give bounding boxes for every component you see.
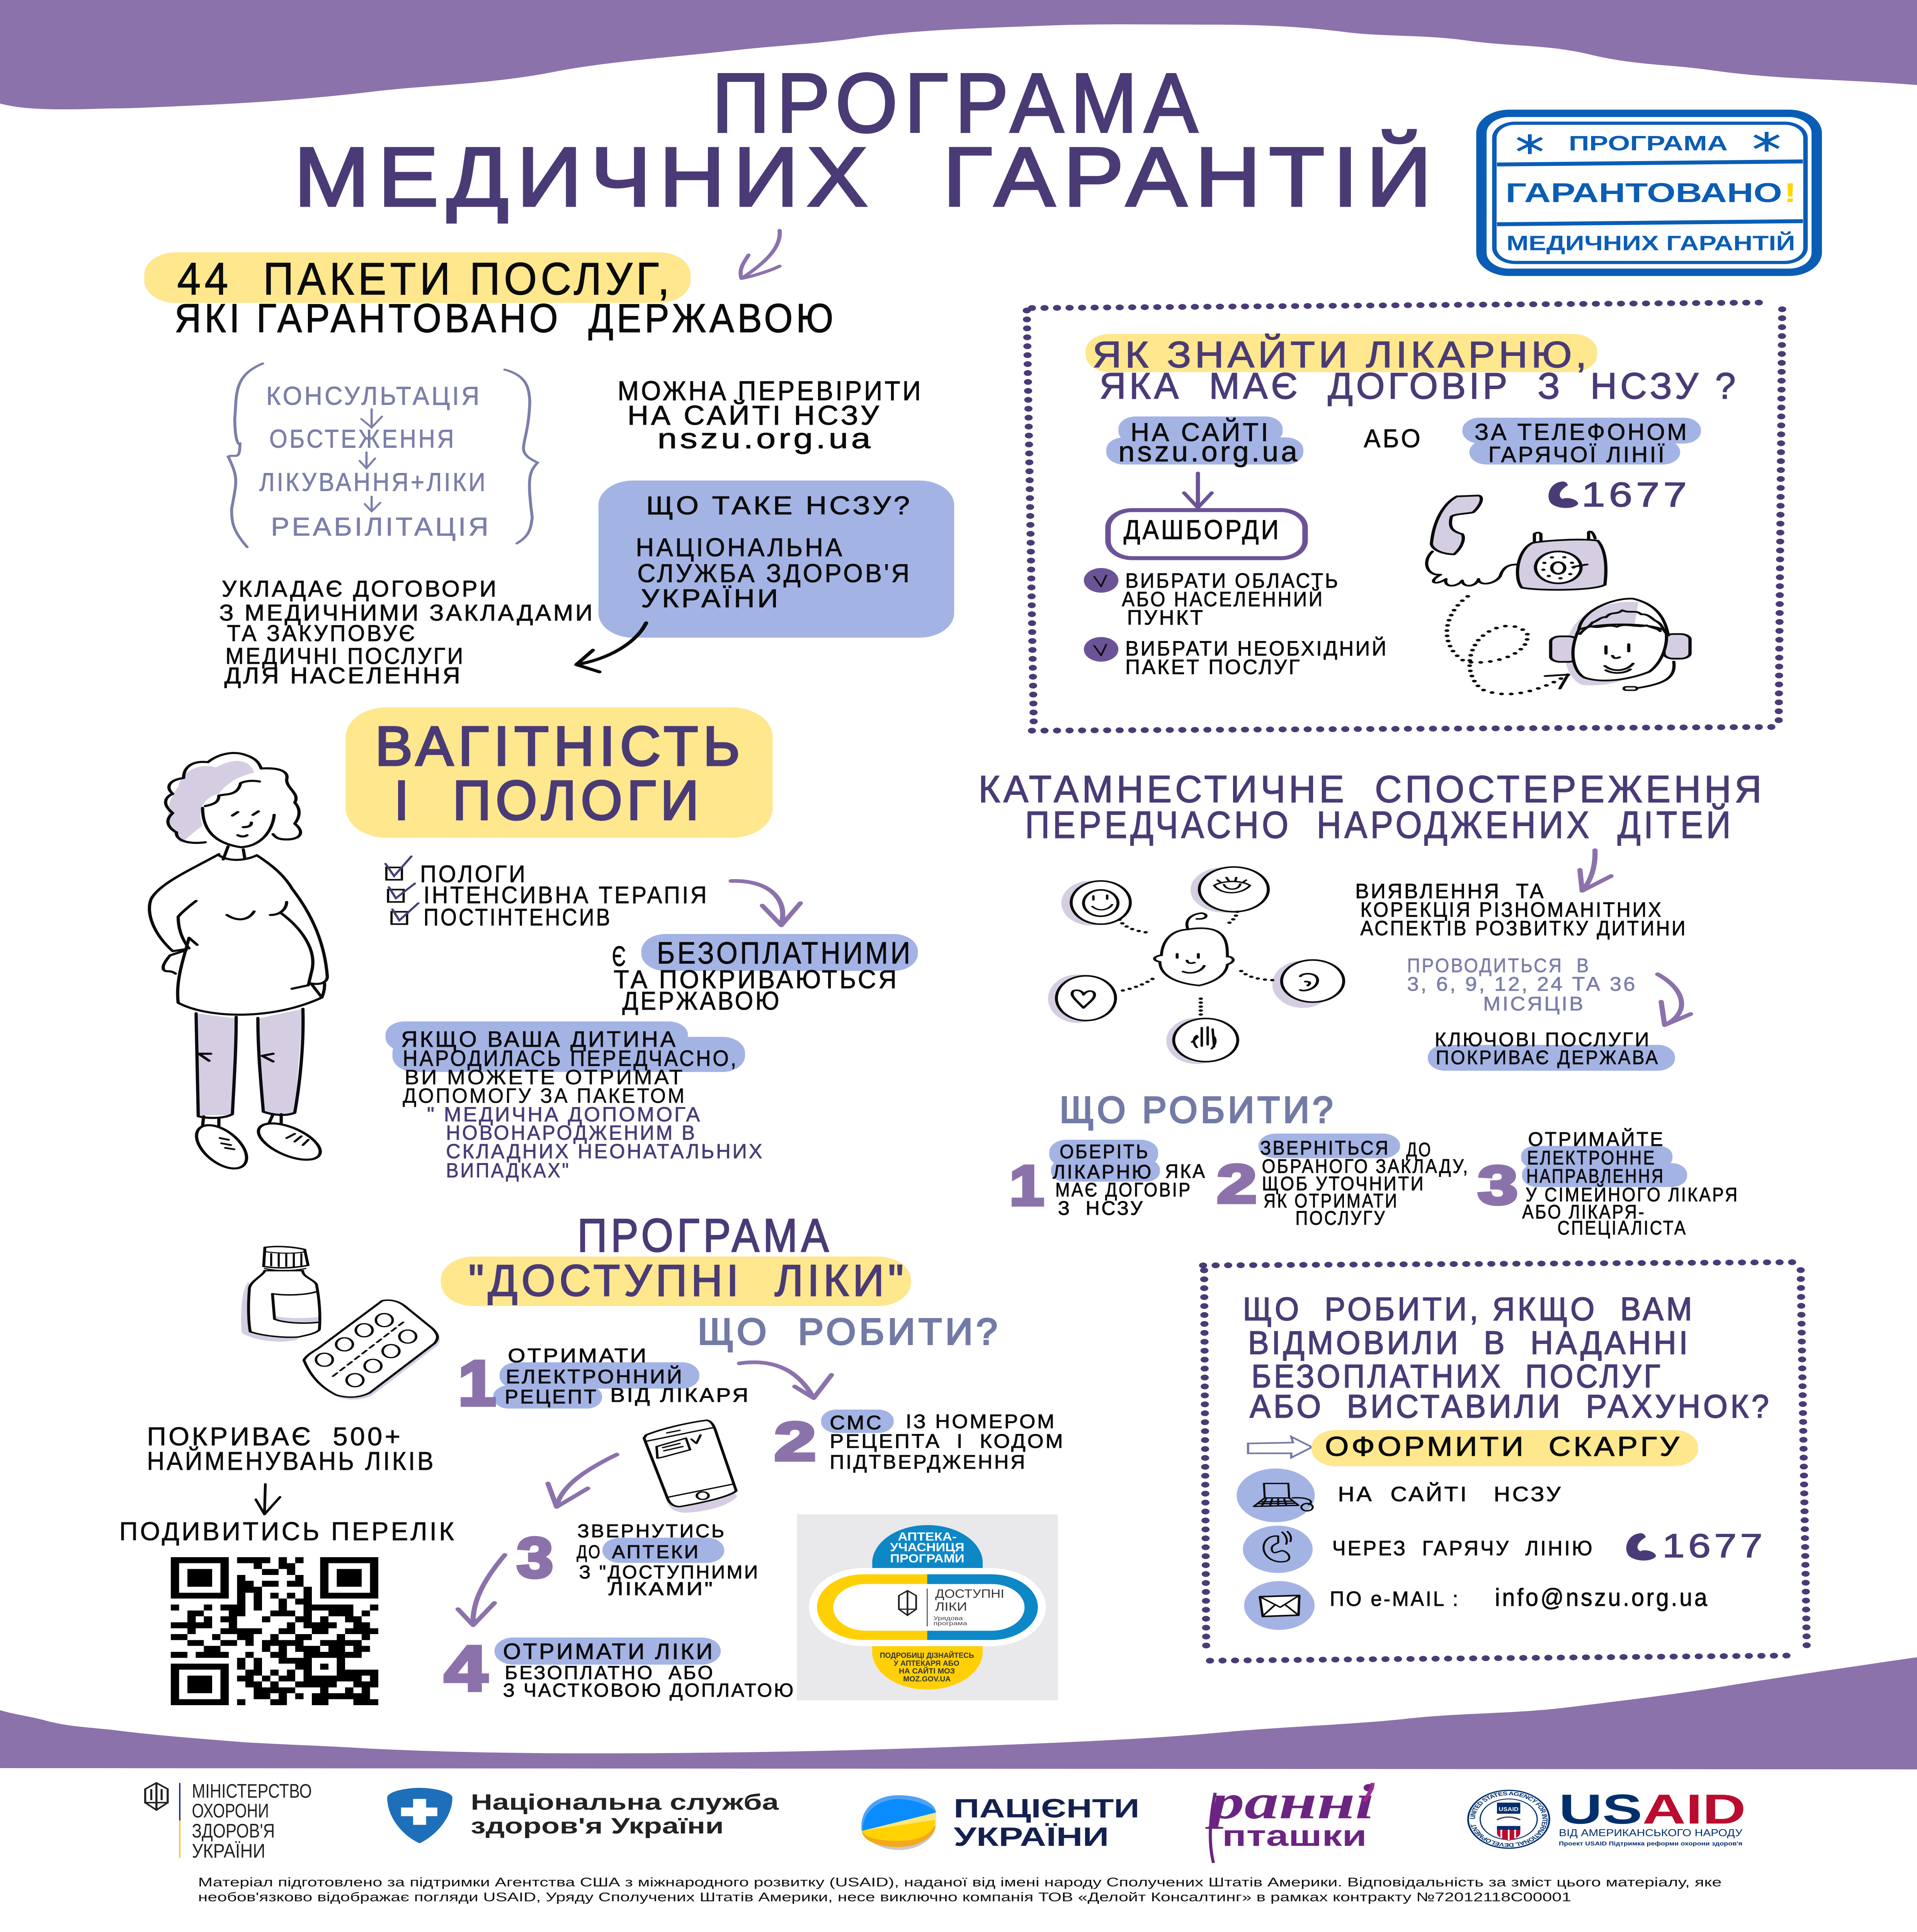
step 1: choose hospital: ОБЕРІТЬ: [1060, 1141, 1150, 1163]
disclaimer text: [198, 1875, 1722, 1904]
checklist: covered services: ІНТЕНСИВНА ТЕРАПІЯ: [424, 882, 709, 908]
step 1: electronic prescription: ЕЛЕКТРОННИЙ: [506, 1365, 684, 1388]
heading: affordable medicines: ПРОГРАМА: [577, 1209, 832, 1262]
service chain in braces: РЕАБІЛІТАЦІЯ: [271, 512, 491, 541]
heading: ЯК ЗНАЙТИ ЛІКАРНЮ,: [1092, 333, 1590, 375]
heading: what to do: ЩО РОБИТИ?: [1060, 1089, 1336, 1130]
service chain in braces: ЛІКУВАННЯ+ЛІКИ: [259, 468, 487, 497]
step 3: get referral: ЕЛЕКТРОННЕ: [1527, 1147, 1656, 1169]
stamp: guaranteed: МЕДИЧНИХ ГАРАНТІЙ: [1507, 231, 1795, 255]
heading: ВІДМОВИЛИ В НАДАННІ: [1248, 1324, 1691, 1361]
file a complaint: [1311, 1430, 1698, 1466]
step 2: contact hospital: ПОСЛУГУ: [1295, 1207, 1386, 1229]
panel: pregnancy heading: І ПОЛОГИ: [394, 770, 704, 832]
step 3: go to pharmacy: 3: [517, 1526, 553, 1589]
arrow: to free services: [731, 881, 800, 925]
step 1: choose hospital: 1: [1009, 1154, 1044, 1217]
text: premature baby package: ВИ МОЖЕТЕ ОТРИМАТ: [405, 1065, 684, 1089]
arrow: from follow-up heading: [1580, 850, 1611, 891]
stamp: guaranteed: [1482, 113, 1817, 272]
step 1: electronic prescription: 1: [458, 1347, 496, 1419]
arrow from title to packages: [741, 230, 780, 279]
panel: what is NSZU: [599, 481, 954, 638]
panel: pregnancy heading: ВАГІТНІСТЬ: [375, 715, 745, 777]
disclaimer text: Матеріал підготовлено за підтримки Агентства США з міжнародного розвитку (USAID), наданої від імені народу Сполучених Штатів Америки. Відповідальність за зміст цього матеріалу, яке: [198, 1875, 1722, 1889]
heading: ЩО РОБИТИ, ЯКЩО ВАМ: [1243, 1291, 1695, 1327]
step 1: choose hospital: ЯКА: [1165, 1160, 1206, 1182]
step 2: sms: [774, 1410, 1065, 1473]
website option: [1106, 417, 1303, 468]
text: premature baby package: НОВОНАРОДЖЕНИМ В: [446, 1121, 697, 1144]
arrow: what to do to step 2: [740, 1362, 832, 1398]
text: premature baby package: [386, 1021, 764, 1182]
stamp: guaranteed: ГАРАНТОВАНО: [1505, 178, 1782, 208]
panel: what is NSZU: ЩО ТАКЕ НСЗУ?: [646, 491, 912, 520]
text: check on website: nszu.org.ua: [658, 422, 874, 454]
logo: national health service: Національна служба: [471, 1790, 779, 1815]
badge: pharmacy participant: ПРОГРАМИ: [890, 1552, 964, 1565]
badge: pharmacy participant: [797, 1514, 1058, 1701]
text: premature baby package: ВИПАДКАХ": [446, 1159, 570, 1182]
badge: pharmacy participant: УЧАСНИЦЯ: [890, 1541, 964, 1554]
step 3: go to pharmacy: ЛІКАМИ": [609, 1579, 714, 1599]
arrow to dashboards: [1184, 473, 1212, 508]
checklist: covered services: ПОСТІНТЕНСИВ: [424, 904, 612, 931]
text: check on website: МОЖНА ПЕРЕВІРИТИ: [617, 376, 923, 406]
contact: hotline: ЧЕРЕЗ ГАРЯЧУ ЛІНІЮ: [1332, 1536, 1594, 1560]
step 4: receive medicines: БЕЗОПЛАТНО АБО: [505, 1662, 714, 1683]
step 3: go to pharmacy: З "ДОСТУПНИМИ: [579, 1562, 760, 1582]
arrow: schedule to key services: [1658, 974, 1691, 1025]
text: NSZU duties: З МЕДИЧНИМИ ЗАКЛАДАМИ: [219, 600, 595, 626]
checklist: covered services: [386, 856, 709, 931]
step 1: choose hospital: З НСЗУ: [1058, 1197, 1144, 1219]
logo: usaid: Проект USAID Підтримка реформи охорони здоров'я: [1559, 1840, 1742, 1847]
or: АБО: [1364, 424, 1423, 453]
heading: БЕЗОПЛАТНИХ ПОСЛУГ: [1252, 1358, 1663, 1395]
contact: email: info@nszu.org.ua: [1495, 1584, 1709, 1611]
logo: early birds: ранні: [1205, 1774, 1374, 1829]
text: detection and correction: ВИЯВЛЕННЯ ТА: [1355, 879, 1545, 903]
panel: what is NSZU: СЛУЖБА ЗДОРОВ'Я: [637, 559, 912, 588]
logo: ministry of health: ЗДОРОВ'Я: [192, 1820, 275, 1842]
logo: usaid: ВІД АМЕРИКАНСЬКОГО НАРОДУ: [1559, 1827, 1742, 1838]
dotted frame: [1203, 1262, 1807, 1661]
heading: 44 packages: [145, 252, 837, 341]
icon: dotted call route: [1447, 596, 1568, 694]
arrow: to complaint: [1248, 1437, 1312, 1458]
icon: pregnant woman: [150, 753, 330, 1174]
panel: how to find a hospital: [1027, 303, 1782, 731]
logo: early birds: пташки: [1222, 1819, 1367, 1852]
arrow: step 3 to step 4: [458, 1555, 505, 1625]
step 2: sms: 2: [774, 1411, 816, 1472]
text: detection and correction: [1355, 879, 1687, 940]
step 2: contact hospital: 2: [1217, 1154, 1257, 1214]
contact: hotline: 1677: [1662, 1527, 1766, 1565]
title: ПРОГРАМА: [712, 56, 1205, 150]
step: choose region: ВИБРАТИ ОБЛАСТЬ: [1125, 569, 1340, 592]
logo: patients of ukraine: УКРАЇНИ: [954, 1821, 1109, 1852]
logo: early birds: [1205, 1774, 1374, 1863]
website option: НА САЙТІ: [1131, 418, 1271, 447]
text: schedule in months: ПРОВОДИТЬСЯ В: [1407, 955, 1590, 976]
icon: smartphone with message: [643, 1420, 737, 1513]
text: premature baby package: " МЕДИЧНА ДОПОМОГА: [427, 1103, 702, 1126]
step 4: receive medicines: З ЧАСТКОВОЮ ДОПЛАТОЮ: [503, 1679, 795, 1701]
step: choose region: [1084, 568, 1340, 629]
contact: email: ПО e-MAIL :: [1330, 1587, 1460, 1611]
heading: 44 packages: 44 ПАКЕТИ ПОСЛУГ,: [177, 253, 673, 304]
step: choose region: ПУНКТ: [1127, 605, 1205, 629]
website option: nszu.org.ua: [1118, 436, 1300, 468]
text: detection and correction: АСПЕКТІВ РОЗВИТКУ ДИТИНИ: [1361, 916, 1687, 940]
heading: [1085, 333, 1739, 406]
text: key services covered: КЛЮЧОВІ ПОСЛУГИ: [1435, 1029, 1651, 1051]
hotline option: [1462, 418, 1701, 467]
step 2: contact hospital: ОБРАНОГО ЗАКЛАДУ,: [1262, 1156, 1469, 1177]
step 3: get referral: ОТРИМАЙТЕ: [1528, 1128, 1665, 1150]
step 2: contact hospital: ЩОБ УТОЧНИТИ: [1262, 1173, 1425, 1195]
step 1: electronic prescription: ВІД ЛІКАРЯ: [610, 1384, 750, 1406]
logo: patients of ukraine: ПАЦІЄНТИ: [954, 1793, 1140, 1823]
icon: baby with five senses: [1048, 867, 1344, 1064]
badge: pharmacy participant: MOZ.GOV.UA: [903, 1675, 951, 1683]
step 2: contact hospital: ЗВЕРНІТЬСЯ: [1260, 1137, 1390, 1159]
panel: what is NSZU: УКРАЇНИ: [641, 584, 781, 613]
title: МЕДИЧНИХ ГАРАНТІЙ: [294, 130, 1440, 223]
checklist: covered services: ПОЛОГИ: [420, 861, 527, 888]
step 3: go to pharmacy: ЗВЕРНУТИСЬ: [577, 1521, 726, 1541]
title: [294, 56, 1440, 223]
stamp: guaranteed: !: [1784, 178, 1796, 208]
text: schedule in months: 3, 6, 9, 12, 24 ТА 36: [1407, 973, 1637, 995]
icon: rotary telephone: [1427, 495, 1606, 590]
text: covers 500+ medicines: НАЙМЕНУВАНЬ ЛІКІВ: [147, 1446, 435, 1476]
top purple wave: [0, 0, 1917, 109]
text: NSZU duties: УКЛАДАЄ ДОГОВОРИ: [222, 576, 498, 602]
step 3: get referral: НАПРАВЛЕННЯ: [1526, 1165, 1665, 1187]
step 1: choose hospital: [1009, 1140, 1206, 1219]
text: schedule in months: МІСЯЦІВ: [1483, 993, 1585, 1015]
heading: follow-up observation: [978, 767, 1765, 846]
panel: what to do if refused: [1203, 1262, 1807, 1661]
logo: patients of ukraine: [861, 1793, 1140, 1852]
badge: pharmacy participant: У АПТЕКАРЯ АБО: [894, 1659, 959, 1667]
step 2: sms: РЕЦЕПТА І КОДОМ: [830, 1430, 1065, 1452]
service chain in braces: [228, 364, 538, 547]
logo: ministry of health: МІНІСТЕРСТВО: [192, 1780, 312, 1802]
text: schedule in months: [1407, 955, 1637, 1015]
text: NSZU duties: ТА ЗАКУПОВУЄ: [227, 621, 417, 646]
logo: usaid: UNITED STATES AGENCY FOR INTERNATIONAL DEVELOPMENT: [1468, 1791, 1549, 1848]
hotline number: [1548, 476, 1691, 514]
badge: pharmacy participant: програма: [934, 1620, 967, 1626]
file a complaint: ОФОРМИТИ СКАРГУ: [1325, 1432, 1682, 1462]
step 4: receive medicines: 4: [444, 1633, 487, 1704]
logo: ministry of health: ОХОРОНИ: [192, 1800, 269, 1822]
disclaimer text: необов'язково відображає погляди USAID, Уряду Сполучених Штатів Америки, несе виключно компанія ТОВ «Делойт Консалтинг» в рамках контракту №72012118C00001: [198, 1890, 1571, 1904]
dashboards box: [1108, 510, 1305, 558]
dotted frame: [1027, 303, 1782, 731]
contact: email: [1244, 1581, 1709, 1630]
step 4: receive medicines: ОТРИМАТИ ЛІКИ: [503, 1639, 714, 1664]
step 1: electronic prescription: РЕЦЕПТ: [505, 1386, 598, 1408]
icon: medicine bottle: [241, 1247, 320, 1342]
step 1: electronic prescription: [458, 1345, 750, 1419]
text: key services covered: [1428, 1029, 1675, 1071]
stamp: guaranteed: ПРОГРАМА: [1569, 131, 1728, 155]
text: free and state covered: ДЕРЖАВОЮ: [622, 986, 781, 1015]
heading: affordable medicines: [441, 1209, 911, 1306]
text: free and state covered: Є: [612, 940, 628, 972]
step 1: choose hospital: МАЄ ДОГОВІР: [1055, 1179, 1192, 1201]
heading: 44 packages: ЯКІ ГАРАНТОВАНО ДЕРЖАВОЮ: [175, 296, 837, 341]
step 2: contact hospital: ЯК ОТРИМАТИ: [1264, 1190, 1398, 1212]
text: covers 500+ medicines: ПОКРИВАЄ 500+: [147, 1422, 403, 1451]
text: free and state covered: ТА ПОКРИВАЮТЬСЯ: [614, 965, 899, 994]
step 2: sms: ІЗ НОМЕРОМ: [906, 1411, 1056, 1432]
text: free and state covered: БЕЗОПЛАТНИМИ: [657, 935, 913, 970]
logo: national health service: [387, 1788, 779, 1843]
badge: pharmacy participant: ЛІКИ: [935, 1600, 967, 1614]
logo: national health service: здоров'я України: [471, 1813, 724, 1838]
logo: usaid: USAID: [1499, 1806, 1519, 1812]
text: premature baby package: ЯКЩО ВАША ДИТИНА: [401, 1027, 678, 1051]
step 1: choose hospital: ЛІКАРНЮ: [1053, 1161, 1153, 1183]
logo: ministry of health: [145, 1780, 312, 1862]
heading: what to do: ЩО РОБИТИ?: [697, 1311, 1001, 1352]
logo: ministry of health: УКРАЇНИ: [192, 1840, 265, 1862]
step 1: electronic prescription: ОТРИМАТИ: [508, 1345, 648, 1367]
step 2: contact hospital: ДО: [1406, 1139, 1432, 1161]
arrow: phone to step 3: [548, 1454, 617, 1507]
step: choose package: ПАКЕТ ПОСЛУГ: [1125, 655, 1301, 679]
service chain in braces: ОБСТЕЖЕННЯ: [269, 425, 456, 453]
text: premature baby package: СКЛАДНИХ НЕОНАТАЛЬНИХ: [446, 1140, 764, 1163]
badge: pharmacy participant: ПОДРОБИЦІ ДІЗНАЙТЕСЬ: [880, 1651, 974, 1660]
service chain in braces: КОНСУЛЬТАЦІЯ: [266, 382, 481, 410]
qr code: [171, 1557, 378, 1705]
icon: hotline operator: [1551, 599, 1690, 690]
panel: pregnancy heading: [346, 707, 773, 838]
step: choose package: ВИБРАТИ НЕОБХІДНИЙ: [1125, 636, 1388, 660]
hotline option: ГАРЯЧОЇ ЛІНІЇ: [1488, 442, 1666, 467]
step: choose package: [1084, 636, 1388, 679]
text: see the list: ПОДИВИТИСЬ ПЕРЕЛІК: [119, 1517, 456, 1546]
badge: pharmacy participant: Урядова: [934, 1615, 963, 1622]
step 4: receive medicines: [444, 1633, 795, 1704]
step 2: sms: СМС: [830, 1412, 883, 1434]
step 3: get referral: 3: [1478, 1155, 1518, 1216]
arrow: to list: [256, 1484, 280, 1514]
text: covers 500+ medicines: [147, 1422, 435, 1476]
step 3: go to pharmacy: [517, 1521, 760, 1599]
text: detection and correction: КОРЕКЦІЯ РІЗНОМАНІТНИХ: [1361, 898, 1663, 921]
dashboards box: ДАШБОРДИ: [1124, 515, 1281, 545]
heading: [1243, 1291, 1772, 1425]
panel: what is NSZU: НАЦІОНАЛЬНА: [636, 533, 844, 562]
step 3: get referral: [1478, 1128, 1739, 1239]
text: NSZU duties: [219, 576, 595, 689]
text: check on website: [617, 376, 923, 454]
step 3: get referral: У СІМЕЙНОГО ЛІКАРЯ: [1526, 1183, 1739, 1206]
icon: blister pack: [304, 1300, 440, 1400]
step 3: get referral: АБО ЛІКАРЯ-: [1522, 1201, 1646, 1223]
badge: pharmacy participant: АПТЕКА-: [898, 1530, 957, 1543]
text: premature baby package: ДОПОМОГУ ЗА ПАКЕТОМ: [403, 1084, 686, 1107]
text: key services covered: ПОКРИВАЄ ДЕРЖАВА: [1436, 1047, 1659, 1068]
text: check on website: НА САЙТІ НСЗУ: [628, 400, 881, 430]
logo: usaid: [1468, 1786, 1746, 1848]
text: NSZU duties: МЕДИЧНІ ПОСЛУГИ: [225, 644, 465, 669]
text: NSZU duties: ДЛЯ НАСЕЛЕННЯ: [225, 663, 463, 689]
hotline number: 1677: [1582, 476, 1691, 514]
step 3: go to pharmacy: ДО: [577, 1542, 602, 1562]
text: free and state covered: [612, 934, 918, 1015]
step 2: contact hospital: [1217, 1134, 1469, 1229]
contact: website: [1237, 1468, 1563, 1522]
badge: pharmacy participant: ДОСТУПНІ: [935, 1587, 1004, 1601]
contact: website: НА САЙТІ НСЗУ: [1338, 1482, 1563, 1505]
logo: usaid: USAID: [1559, 1786, 1746, 1832]
bottom purple wave: [0, 1657, 1917, 1769]
hotline option: ЗА ТЕЛЕФОНОМ: [1475, 418, 1689, 445]
heading: affordable medicines: "ДОСТУПНІ ЛІКИ": [468, 1255, 908, 1305]
step 2: sms: ПІДТВЕРДЖЕННЯ: [830, 1451, 1027, 1473]
contact: hotline: [1243, 1526, 1766, 1573]
badge: pharmacy participant: НА САЙТІ МОЗ: [899, 1667, 955, 1675]
arrow: from NSZU panel: [576, 623, 646, 672]
step 3: go to pharmacy: АПТЕКИ: [612, 1542, 700, 1562]
step: choose region: АБО НАСЕЛЕННИЙ: [1122, 587, 1324, 611]
text: premature baby package: НАРОДИЛАСЬ ПЕРЕДЧАСНО,: [403, 1046, 738, 1071]
step 3: get referral: СПЕЦІАЛІСТА: [1558, 1217, 1687, 1239]
